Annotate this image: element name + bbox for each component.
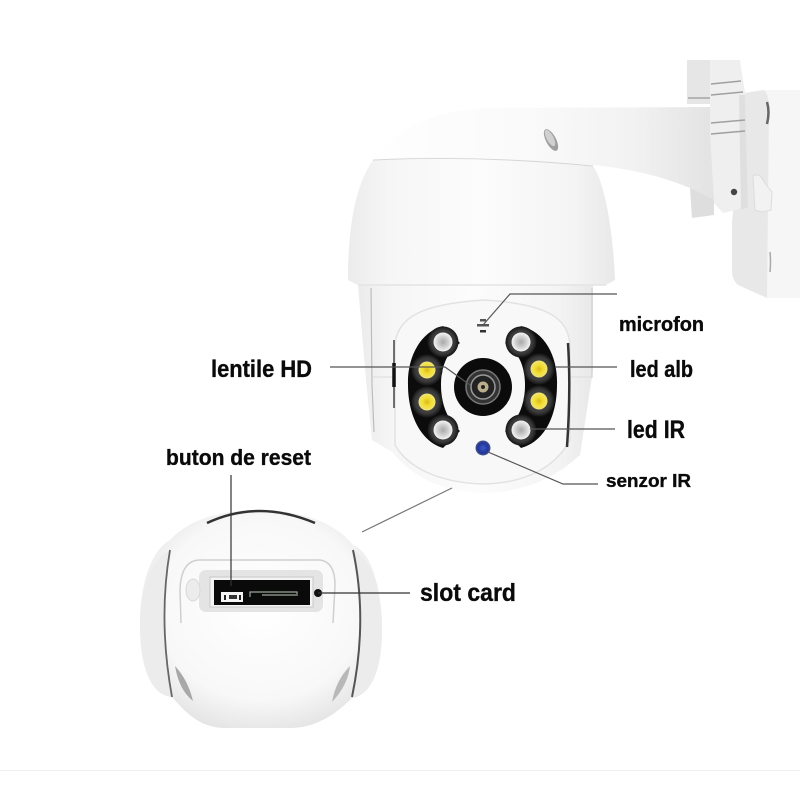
LED IR bottom left: [428, 414, 458, 446]
LED white upper right: [524, 354, 554, 384]
arm and dome top: [373, 107, 718, 202]
label: buton de reset: buton de reset: [166, 445, 312, 470]
lower housing: [358, 285, 593, 493]
top arc: [207, 511, 315, 523]
slot recess: [199, 570, 323, 612]
label: slot card: slot card: [420, 579, 516, 607]
right side lobe shading: [352, 550, 382, 697]
LED panel right: [505, 326, 557, 448]
IR sensor: [476, 440, 490, 456]
LED IR top right: [506, 326, 536, 358]
reset button: [221, 592, 243, 602]
LED IR bottom right: [506, 414, 536, 446]
left seam: [164, 550, 172, 697]
right seam: [352, 550, 360, 697]
leader lines: [231, 294, 617, 593]
wall mount bracket and antennas: [373, 60, 800, 298]
mount knob: [753, 175, 772, 212]
wall box: [732, 90, 800, 298]
vent left: [175, 666, 193, 701]
cover groove: [180, 560, 335, 623]
label: senzor IR: senzor IR: [606, 471, 691, 491]
label: microfon: microfon: [619, 314, 704, 336]
card slot: [210, 577, 313, 607]
dome cap: [348, 157, 615, 285]
back antenna: [687, 60, 711, 104]
camera lens: [454, 358, 512, 416]
front antenna: [710, 60, 748, 213]
LED white lower right: [524, 386, 554, 416]
LED white lower left: [412, 386, 442, 418]
left side lobe shading: [140, 550, 172, 697]
rear view of camera: [140, 510, 382, 728]
LED IR top left: [428, 326, 458, 358]
microphone holes: [477, 319, 489, 332]
label: lentile HD: lentile HD: [211, 356, 312, 383]
LED panel left: [408, 326, 460, 448]
label: led IR: led IR: [627, 416, 685, 444]
LED white upper left: [412, 354, 442, 386]
dome camera body: [348, 157, 615, 493]
face plate: [395, 300, 570, 484]
label: led alb: led alb: [630, 356, 693, 382]
vent right: [332, 666, 350, 702]
slot screw hole: [314, 589, 322, 597]
